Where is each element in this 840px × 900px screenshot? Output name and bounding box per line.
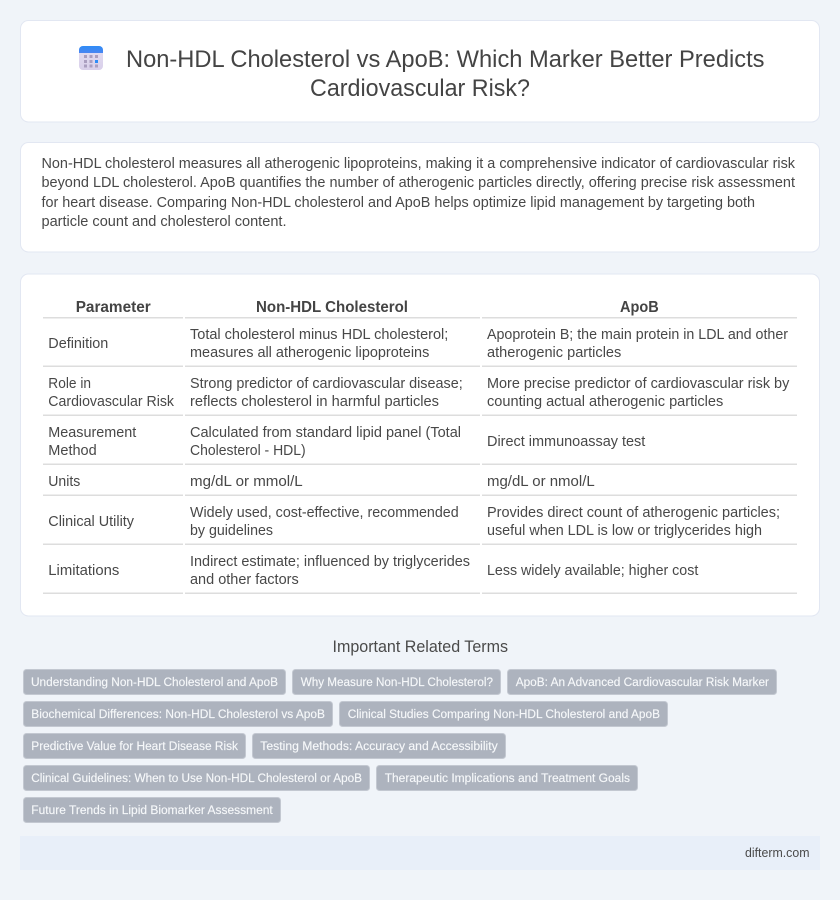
footer (20, 836, 820, 870)
chip: clinical studies (340, 702, 668, 726)
chip: apob marker: ApoB: An Advanced Cardiovascular Risk Marker (516, 675, 769, 689)
icon: calendar (79, 46, 103, 70)
row: measurement method (43, 425, 797, 465)
chip: why measure: Why Measure Non-HDL Cholesterol? (301, 675, 493, 689)
chip: understanding (24, 670, 286, 694)
row: clinical utility: useful when LDL is low or triglycerides high (487, 523, 762, 539)
row: units (43, 474, 797, 496)
table header: Parameter (76, 299, 151, 316)
row: role in cardiovascular risk: reflects cholesterol in harmful particles (190, 394, 439, 410)
row: clinical utility (43, 505, 797, 545)
chip: clinical studies: Clinical Studies Comparing Non-HDL Cholesterol and ApoB (348, 707, 660, 721)
row: units: mg/dL or mmol/L (190, 474, 303, 490)
row: role in cardiovascular risk: Role in (48, 376, 91, 392)
chip: future trends (24, 798, 280, 822)
row: definition: Definition (48, 336, 108, 352)
row: role in cardiovascular risk: Strong predictor of cardiovascular disease; (190, 376, 463, 392)
row: clinical utility: Clinical Utility (48, 514, 135, 530)
row: definition (43, 327, 797, 367)
text block: introduction: beyond LDL cholesterol. ApoB quantifies the number of atherogenic particles directly, offering precise risk assessment (42, 175, 795, 191)
row: measurement method: Measurement (48, 425, 136, 441)
row: limitations: Less widely available; higher cost (487, 563, 698, 579)
row: definition: Apoprotein B; the main protein in LDL and other (487, 327, 788, 343)
chip: clinical guidelines: Clinical Guidelines: When to Use Non-HDL Cholesterol or ApoB (31, 771, 362, 785)
row: role in cardiovascular risk: counting actual atherogenic particles (487, 394, 723, 410)
chip: biochemical differences: Biochemical Differences: Non-HDL Cholesterol vs ApoB (31, 707, 325, 721)
chip: biochemical differences (24, 702, 332, 726)
text block: introduction: for heart disease. Comparing Non-HDL cholesterol and ApoB helps optimize lipid management by targeting both (42, 195, 755, 211)
chip: apob marker (508, 670, 776, 694)
related term chips (24, 670, 776, 822)
row: measurement method: Method (48, 443, 97, 459)
row: definition: atherogenic particles (487, 345, 621, 361)
footer source text: difterm.com (745, 845, 810, 860)
chip: therapeutic implications (376, 766, 638, 790)
title: Cardiovascular Risk? (310, 75, 530, 102)
chip: why measure (292, 670, 500, 694)
table header: ApoB (620, 299, 659, 316)
chip: predictive value: Predictive Value for Heart Disease Risk (31, 739, 239, 753)
text block: introduction: Non-HDL cholesterol measures all atherogenic lipoproteins, making it a comprehensive indicator of cardiovascular risk (42, 156, 796, 172)
row: clinical utility: by guidelines (190, 523, 273, 539)
text block: introduction (42, 156, 796, 230)
title (126, 46, 764, 102)
title: Non-HDL Cholesterol vs ApoB: Which Marker Better Predicts (126, 46, 764, 73)
panel: introduction (20, 142, 820, 252)
row: units: Units (48, 474, 80, 490)
row: measurement method: Cholesterol - HDL) (190, 443, 306, 459)
panel: comparison table (20, 274, 820, 616)
row: measurement method: Direct immunoassay test (487, 434, 645, 450)
row: definition: measures all atherogenic lipoproteins (190, 345, 429, 361)
panel: header (20, 20, 820, 122)
row: limitations: Limitations (48, 563, 119, 579)
heading: important related terms: Important Related Terms (332, 638, 508, 656)
row: limitations (43, 554, 797, 594)
chip: therapeutic implications: Therapeutic Implications and Treatment Goals (385, 771, 630, 785)
chip: understanding: Understanding Non-HDL Cholesterol and ApoB (31, 675, 278, 689)
row: definition: Total cholesterol minus HDL cholesterol; (190, 327, 448, 343)
chip: testing methods (252, 734, 506, 758)
table header (43, 299, 797, 318)
table header: Non-HDL Cholesterol (256, 299, 408, 316)
chip: future trends: Future Trends in Lipid Biomarker Assessment (31, 803, 273, 817)
row: limitations: Indirect estimate; influenced by triglycerides (190, 554, 470, 570)
chip: testing methods: Testing Methods: Accuracy and Accessibility (260, 739, 498, 753)
chip: predictive value (24, 734, 246, 758)
row: role in cardiovascular risk (43, 376, 797, 416)
row: clinical utility: Provides direct count of atherogenic particles; (487, 505, 780, 521)
row: role in cardiovascular risk: More precise predictor of cardiovascular risk by (487, 376, 790, 392)
text block: introduction: particle count and cholesterol content. (42, 214, 286, 230)
row: units: mg/dL or nmol/L (487, 474, 595, 490)
row: role in cardiovascular risk: Cardiovascular Risk (48, 394, 175, 410)
row: measurement method: Calculated from standard lipid panel (Total (190, 425, 461, 441)
chip: clinical guidelines (24, 766, 370, 790)
row: limitations: and other factors (190, 572, 299, 588)
row: clinical utility: Widely used, cost-effective, recommended (190, 505, 459, 521)
